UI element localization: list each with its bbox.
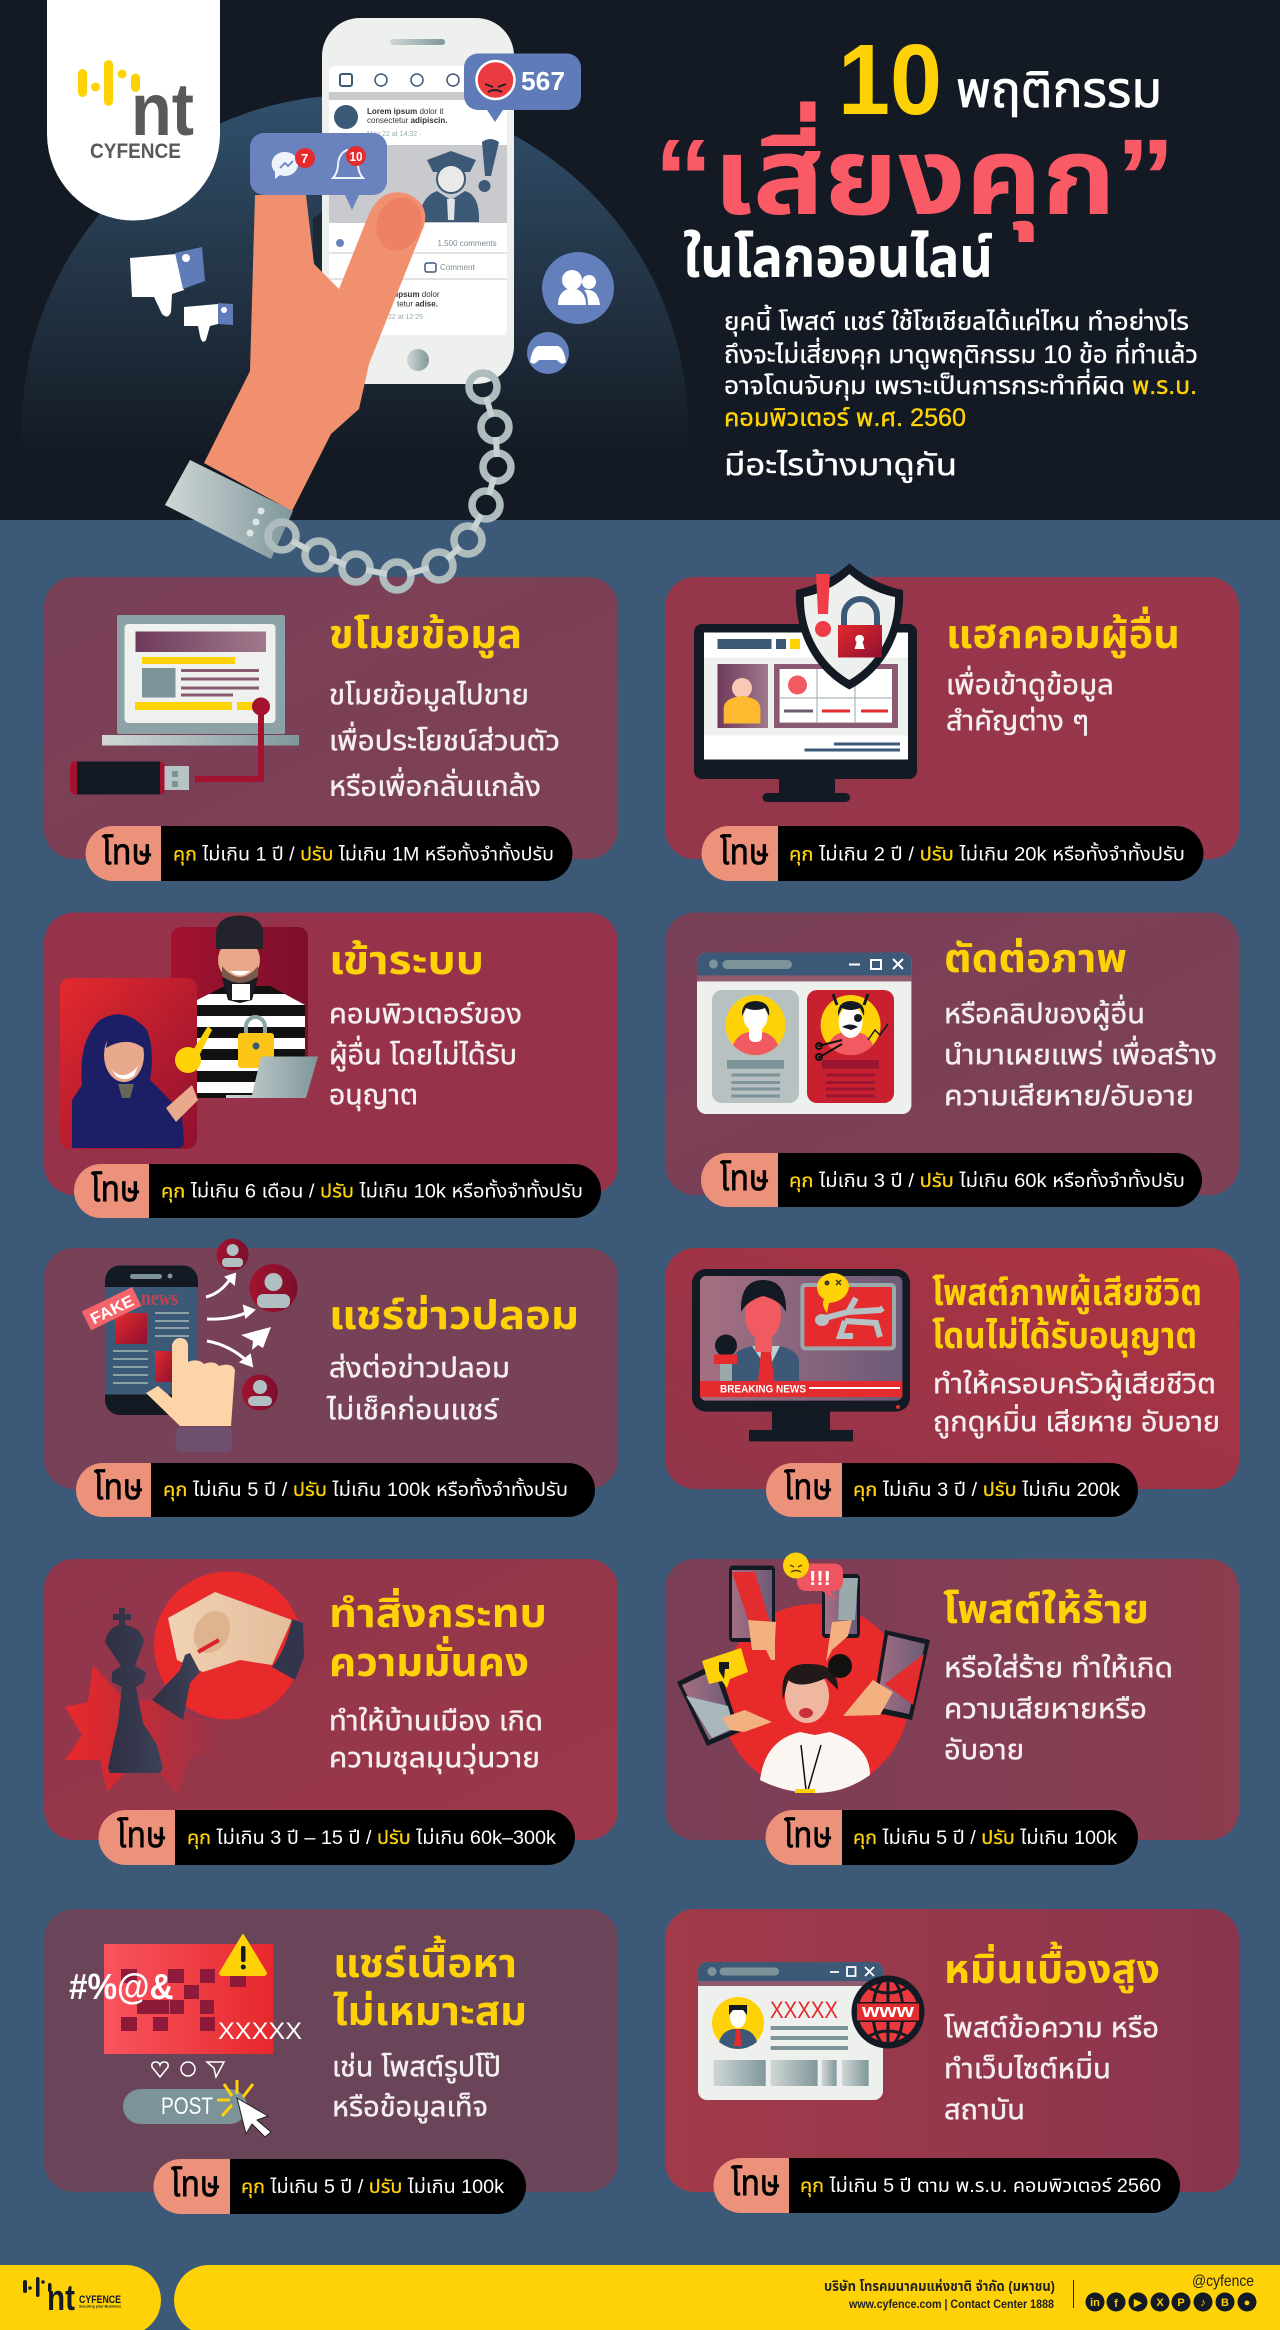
heading: เข้าระบบ xyxy=(329,938,484,983)
description xyxy=(329,1705,543,1774)
penalty pill: คุก ไม่เกิน 1 ปี / ปรับ ไม่เกิน 1M หรือทั้งจำทั้งปรับ xyxy=(173,842,554,866)
description: ความเสียหาย/อับอาย xyxy=(944,1080,1194,1111)
icon: angry reaction count xyxy=(464,54,581,122)
description: นำมาเผยแพร่ เพื่อสร้าง xyxy=(944,1035,1217,1070)
description: คอมพิวเตอร์ของ xyxy=(329,998,522,1029)
icon: people circle xyxy=(542,252,614,324)
penalty pill: คุก ไม่เกิน 2 ปี / ปรับ ไม่เกิน 20k หรือทั้งจำทั้งปรับ xyxy=(789,842,1185,866)
heading: ไม่เหมาะสม xyxy=(333,1989,527,2034)
header background xyxy=(0,0,1280,520)
description xyxy=(332,2051,501,2124)
penalty pill: คุก ไม่เกิน 6 เดือน / ปรับ ไม่เกิน 10k หรือทั้งจำทั้งปรับ xyxy=(161,1179,583,1202)
social icons: in xyxy=(1090,2297,1100,2309)
icon: angry reaction count: 567 xyxy=(521,66,565,96)
icon: smartphone: Comment xyxy=(440,263,475,272)
social icons: P xyxy=(1177,2297,1185,2309)
intro paragraph: อาจโดนจับกุม เพราะเป็นการกระทำที่ผิด xyxy=(724,368,1125,401)
intro paragraph xyxy=(724,304,1198,483)
icon: smartphone: consectetur adipiscin. xyxy=(367,116,447,125)
penalty pill: โทษ xyxy=(784,1814,832,1855)
description xyxy=(944,1652,1173,1765)
description: หรือข้อมูลเท็จ xyxy=(332,2091,488,2124)
penalty pill: โทษ xyxy=(720,1157,769,1198)
penalty pill xyxy=(74,1164,601,1218)
description: อนุญาต xyxy=(329,1079,418,1111)
panel: unauthorized system access xyxy=(44,912,618,1218)
heading: ตัดต่อภาพ xyxy=(944,936,1127,981)
icon: woman pointed at by phones: !!! xyxy=(809,1568,831,1590)
description: ความเสียหายหรือ xyxy=(944,1693,1147,1724)
icon: browser with www globe: www xyxy=(861,2001,915,2021)
footer contact block: บริษัท โทรคมนาคมแห่งชาติ จำกัด (มหาชน) xyxy=(824,2278,1055,2294)
icon: monitor with shield xyxy=(694,564,917,802)
intro paragraph: คอมพิวเตอร์ พ.ศ. 2560 xyxy=(724,404,966,432)
icon: breaking news tv xyxy=(692,1269,910,1441)
icon: smartphone: 1.500 comments xyxy=(438,239,497,248)
penalty pill: โทษ xyxy=(91,1168,140,1209)
description: ความชุลมุนวุ่นวาย xyxy=(329,1742,540,1774)
description: สำคัญต่าง ๆ xyxy=(946,705,1089,736)
footer contact block xyxy=(174,2265,1280,2330)
penalty pill: โทษ xyxy=(720,831,769,872)
heading: ความมั่นคง xyxy=(329,1635,529,1685)
heading: แฮกคอมผู้อื่น xyxy=(946,606,1180,659)
penalty pill: โทษ xyxy=(117,1814,166,1855)
penalty pill: โทษ xyxy=(171,2163,220,2204)
footer logo block: CYFENCE xyxy=(79,2294,121,2306)
penalty pill xyxy=(766,1810,1138,1865)
heading: หมิ่นเบื้องสูง xyxy=(944,1941,1160,1994)
footer logo block: nt xyxy=(47,2277,75,2318)
intro paragraph: พ.ร.บ. xyxy=(1132,372,1197,400)
footer logo block xyxy=(0,2265,161,2330)
heading: โพสต์ภาพผู้เสียชีวิต xyxy=(932,1272,1202,1314)
penalty pill: คุก ไม่เกิน 5 ปี / ปรับ ไม่เกิน 100k หรือทั้งจำทั้งปรับ xyxy=(163,1477,568,1501)
icon: smartphone: 22 at 12:25 · xyxy=(388,314,427,321)
penalty pill xyxy=(154,2159,526,2214)
description xyxy=(944,994,1217,1111)
icon: breaking news tv: BREAKING NEWS xyxy=(720,1383,806,1395)
description: ทำเว็บไซต์หมิ่น xyxy=(944,2051,1111,2084)
description: ผู้อื่น โดยไม่ได้รับ xyxy=(329,1035,517,1072)
description: โพสต์ข้อความ หรือ xyxy=(944,2012,1159,2043)
icon: hand xyxy=(204,191,429,511)
description: เช่น โพสต์รูปโป๊ xyxy=(332,2051,501,2084)
penalty pill xyxy=(714,2158,1180,2213)
icon: company logo: CYFENCE xyxy=(90,140,181,163)
penalty pill: คุก ไม่เกิน 5 ปี / ปรับ ไม่เกิน 100k xyxy=(853,1826,1118,1849)
heading xyxy=(932,1272,1202,1357)
panel: edit images xyxy=(665,912,1239,1207)
icon: phone with fake news: news xyxy=(141,1285,178,1310)
description: ทำให้บ้านเมือง เกิด xyxy=(329,1705,543,1736)
footer xyxy=(0,2265,1280,2330)
panel: share fake news xyxy=(44,1238,618,1517)
heading: โดนไม่ได้รับอนุญาต xyxy=(932,1315,1197,1357)
penalty pill xyxy=(86,826,572,881)
heading xyxy=(333,1935,527,2034)
icon: phone with fake news: FAKE xyxy=(88,1293,137,1328)
description: ไม่เช็คก่อนแชร์ xyxy=(326,1394,499,1425)
social icons: ♪ xyxy=(1200,2297,1206,2309)
social icons: B xyxy=(1221,2297,1229,2309)
icon: two hackers xyxy=(60,916,318,1149)
penalty pill xyxy=(702,826,1203,881)
description xyxy=(326,1352,510,1425)
icon: censored post: #%@& xyxy=(69,1966,174,2007)
description: หรือเพื่อกลั่นแกล้ง xyxy=(329,766,541,802)
title: พฤติกรรม xyxy=(956,62,1162,118)
icon: smartphone: Lorem ipsum dolor it xyxy=(367,107,444,116)
icon: smartphone: tetur adise. xyxy=(397,300,438,308)
icon: browser with www globe: XXXXX xyxy=(770,1997,838,2024)
description: เพื่อประโยชน์ส่วนตัว xyxy=(329,721,560,756)
panel: lese majeste xyxy=(665,1909,1239,2213)
icon: messenger and bell notification xyxy=(250,133,387,210)
title: “เสี่ยงคุก” xyxy=(654,102,1175,242)
description: ถูกดูหมิ่น เสียหาย อับอาย xyxy=(933,1404,1220,1439)
heading: แชร์เนื้อหา xyxy=(333,1935,517,1986)
icon: chain xyxy=(268,373,511,590)
penalty pill xyxy=(701,1153,1202,1207)
title: 10 xyxy=(838,24,942,136)
penalty pill: โทษ xyxy=(731,2162,780,2203)
heading xyxy=(329,1587,547,1685)
panel: threaten national security xyxy=(44,1559,618,1865)
icon: large thumbs down xyxy=(130,247,205,317)
description xyxy=(933,1368,1220,1439)
intro paragraph: ยุคนี้ โพสต์ แชร์ ใช้โซเชียลได้แค่ไหน ทำอย่างไร xyxy=(724,304,1189,337)
description: อับอาย xyxy=(944,1734,1024,1765)
icon: smartphone: May 22 at 14:32 · xyxy=(367,131,421,138)
icon: messenger and bell notification: 7 xyxy=(301,151,308,166)
penalty pill: โทษ xyxy=(94,1466,143,1507)
icon: game controller circle xyxy=(527,332,569,374)
icon: laptop and usb drive xyxy=(70,615,299,794)
heading: โพสต์ให้ร้าย xyxy=(943,1587,1149,1632)
social icons: ● xyxy=(1244,2297,1250,2309)
description: เพื่อเข้าดูข้อมูล xyxy=(946,665,1114,702)
icon: censored post: XXXXX xyxy=(218,2018,302,2045)
intro paragraph: มีอะไรบ้างมาดูกัน xyxy=(724,449,957,483)
icon: company logo xyxy=(47,0,220,220)
panel: inappropriate content xyxy=(44,1909,618,2214)
description: ทำให้ครอบครัวผู้เสียชีวิต xyxy=(933,1368,1216,1401)
icon: handcuff xyxy=(165,460,293,559)
footer contact block: www.cyfence.com | Contact Center 1888 xyxy=(848,2297,1054,2311)
panel: post images of the deceased xyxy=(665,1248,1239,1517)
intro paragraph: ถึงจะไม่เสี่ยงคุก มาดูพฤติกรรม 10 ข้อ ที่ทำแล้ว xyxy=(724,337,1198,370)
penalty pill: โทษ xyxy=(784,1466,832,1507)
penalty pill xyxy=(98,1810,575,1865)
icon: smartphone xyxy=(322,18,514,384)
description: สถาบัน xyxy=(944,2094,1025,2125)
heading: ขโมยข้อมูล xyxy=(329,612,522,659)
panel: hack computer xyxy=(665,564,1239,881)
penalty pill: คุก ไม่เกิน 3 ปี / ปรับ ไม่เกิน 60k หรือทั้งจำทั้งปรับ xyxy=(789,1168,1185,1192)
description xyxy=(946,665,1114,736)
icon: smartphone: ipsum dolor xyxy=(396,290,440,299)
icon: messenger and bell notification: 10 xyxy=(350,149,362,164)
icon: small thumbs down xyxy=(184,303,233,342)
social icons: ▶ xyxy=(1134,2297,1143,2309)
footer contact block: @cyfence xyxy=(1192,2273,1254,2290)
icon: browser with www globe xyxy=(698,1962,924,2100)
description: หรือใส่ร้าย ทำให้เกิด xyxy=(944,1652,1173,1683)
description xyxy=(329,679,560,802)
footer logo block: Securing your Business xyxy=(79,2304,122,2308)
icon: company logo: nt xyxy=(131,68,194,151)
header illustration: hand holding phone in handcuffs xyxy=(47,0,614,590)
title: ในโลกออนไลน์ xyxy=(683,226,993,289)
social icons: f xyxy=(1114,2298,1118,2310)
description: ขโมยข้อมูลไปขาย xyxy=(329,679,529,712)
description: ส่งต่อข่าวปลอม xyxy=(329,1352,510,1383)
heading: ทำสิ่งกระทบ xyxy=(329,1587,547,1636)
penalty pill: คุก ไม่เกิน 3 ปี – 15 ปี / ปรับ ไม่เกิน 60k–300k xyxy=(187,1826,557,1849)
icon: censored post: POST xyxy=(161,2093,213,2120)
penalty pill: คุก ไม่เกิน 3 ปี / ปรับ ไม่เกิน 200k xyxy=(853,1478,1121,1501)
title xyxy=(654,24,1175,289)
panel: steal data xyxy=(44,577,618,881)
icon: woman pointed at by phones xyxy=(677,1552,930,1793)
icon: censored post xyxy=(69,1935,302,2137)
social icons xyxy=(1086,2292,1256,2312)
penalty pill: คุก ไม่เกิน 5 ปี / ปรับ ไม่เกิน 100k xyxy=(241,2175,505,2198)
social icons: X xyxy=(1156,2297,1164,2309)
description xyxy=(944,2012,1159,2125)
penalty pill: คุก ไม่เกิน 5 ปี ตาม พ.ร.บ. คอมพิวเตอร์ 2560 xyxy=(800,2174,1161,2197)
description xyxy=(329,998,522,1111)
icon: chess hand and king xyxy=(65,1572,304,1795)
panel: defamation post xyxy=(665,1552,1239,1865)
icon: browser with edited profile xyxy=(697,952,911,1114)
penalty pill xyxy=(766,1463,1138,1517)
description: หรือคลิปของผู้อื่น xyxy=(944,994,1145,1031)
penalty pill: โทษ xyxy=(102,831,152,872)
penalty pill xyxy=(76,1463,595,1517)
heading: แชร์ข่าวปลอม xyxy=(329,1293,579,1338)
icon: phone with fake news xyxy=(82,1238,298,1452)
